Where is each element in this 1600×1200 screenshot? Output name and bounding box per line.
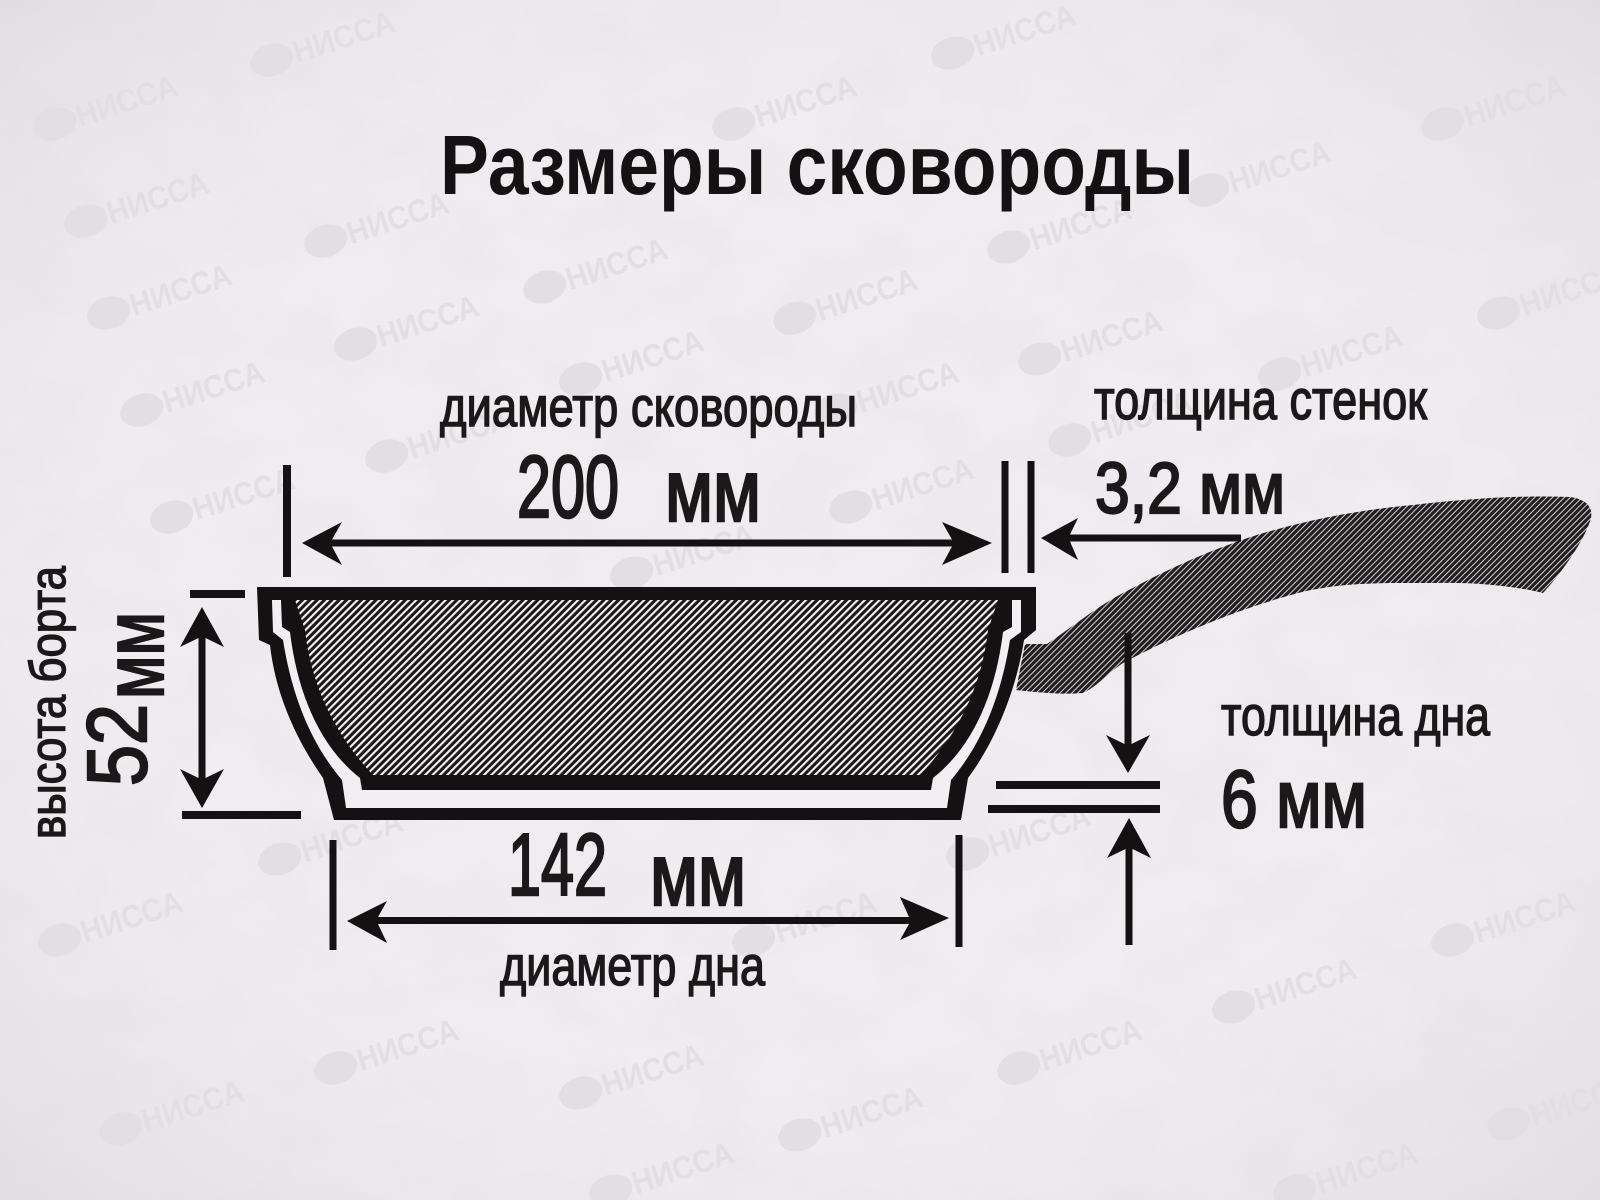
label: base thickness: толщина дна xyxy=(1221,684,1491,747)
watermark pattern: НИССА xyxy=(984,797,1095,864)
value unit: mm: мм xyxy=(665,441,761,540)
watermark pattern: НИССА xyxy=(137,1072,248,1139)
label: base diameter: диаметр дна xyxy=(500,934,766,997)
watermark pattern: НИССА xyxy=(1056,302,1167,369)
label: pan diameter: диаметр сковороды xyxy=(440,375,857,438)
dimension: wall thickness xyxy=(1005,368,1427,573)
watermark pattern: НИССА xyxy=(1025,190,1136,257)
value: 200: 200 xyxy=(517,437,619,536)
extension lines xyxy=(333,835,959,950)
value: 6 mm: 6 мм xyxy=(1221,754,1367,845)
extension line left xyxy=(283,465,291,577)
watermark pattern: НИССА xyxy=(770,883,881,950)
value: 52: 52 xyxy=(70,704,164,786)
value unit: mm: мм xyxy=(650,825,746,924)
watermark pattern: НИССА xyxy=(750,67,861,134)
pan outer body xyxy=(257,587,1036,820)
watermark pattern: НИССА xyxy=(561,230,672,297)
arrow: base diameter xyxy=(347,897,949,943)
arrow: rim height xyxy=(180,607,224,808)
arrow: wall thickness xyxy=(1041,518,1241,560)
watermark pattern: НИССА xyxy=(1459,67,1570,134)
dimension: pan diameter xyxy=(283,375,992,577)
pan gap between walls xyxy=(272,600,1021,808)
watermark pattern: НИССА xyxy=(296,802,407,869)
watermark pattern: НИССА xyxy=(1311,1134,1422,1200)
watermark pattern: НИССА xyxy=(648,516,759,583)
icon: frying pan cross-section xyxy=(257,496,1591,820)
watermark pattern: НИССА xyxy=(811,261,922,328)
watermark pattern: НИССА xyxy=(1250,950,1361,1017)
watermark pattern: НИССА xyxy=(76,883,187,950)
watermark pattern: НИССА xyxy=(597,322,708,389)
arrow: up to base xyxy=(1107,818,1151,945)
watermark pattern: НИССА xyxy=(188,460,299,527)
label: wall thickness: толщина стенок xyxy=(1094,368,1427,431)
value: 142: 142 xyxy=(508,815,607,914)
dimension: rim height xyxy=(20,566,301,839)
label: rim height: высота борта xyxy=(20,566,76,839)
value: 3,2 mm: 3,2 мм xyxy=(1095,449,1285,529)
watermark pattern: НИССА xyxy=(1469,883,1580,950)
watermark pattern: НИССА xyxy=(352,1011,463,1078)
pan handle xyxy=(1016,496,1591,694)
watermark pattern: НИССА xyxy=(372,287,483,354)
watermark pattern: НИССА xyxy=(288,3,399,70)
watermark pattern: НИССА xyxy=(1035,1011,1146,1078)
watermark pattern: НИССА xyxy=(1086,383,1197,450)
watermark pattern: НИССА xyxy=(71,67,182,134)
watermark pattern: НИССА xyxy=(158,353,269,420)
pan inner shell xyxy=(281,600,1012,790)
arrow: pan diameter xyxy=(302,522,992,565)
watermark pattern: НИССА xyxy=(1224,133,1335,200)
dimension: base diameter xyxy=(333,815,959,997)
value unit: mm: мм xyxy=(87,612,181,699)
arrow: down to base xyxy=(1106,633,1150,773)
watermark pattern: НИССА xyxy=(627,1134,738,1200)
watermark pattern: НИССА xyxy=(102,164,213,231)
pan hatched interior xyxy=(295,600,998,775)
watermark pattern: НИССА xyxy=(1296,317,1407,384)
watermark pattern: НИССА xyxy=(852,353,963,420)
extension lines xyxy=(988,785,1160,809)
title: Размеры сковороды xyxy=(440,118,1194,212)
extension lines xyxy=(182,594,301,815)
dimension: base thickness xyxy=(988,633,1491,945)
extension lines xyxy=(1005,461,1031,573)
watermark pattern: НИССА xyxy=(125,256,236,323)
watermark pattern: НИССА xyxy=(597,1036,708,1103)
watermark pattern: НИССА xyxy=(403,399,514,466)
watermark pattern: НИССА xyxy=(816,1078,927,1145)
watermark pattern: НИССА xyxy=(342,184,453,251)
watermark pattern: НИССА xyxy=(867,450,978,517)
